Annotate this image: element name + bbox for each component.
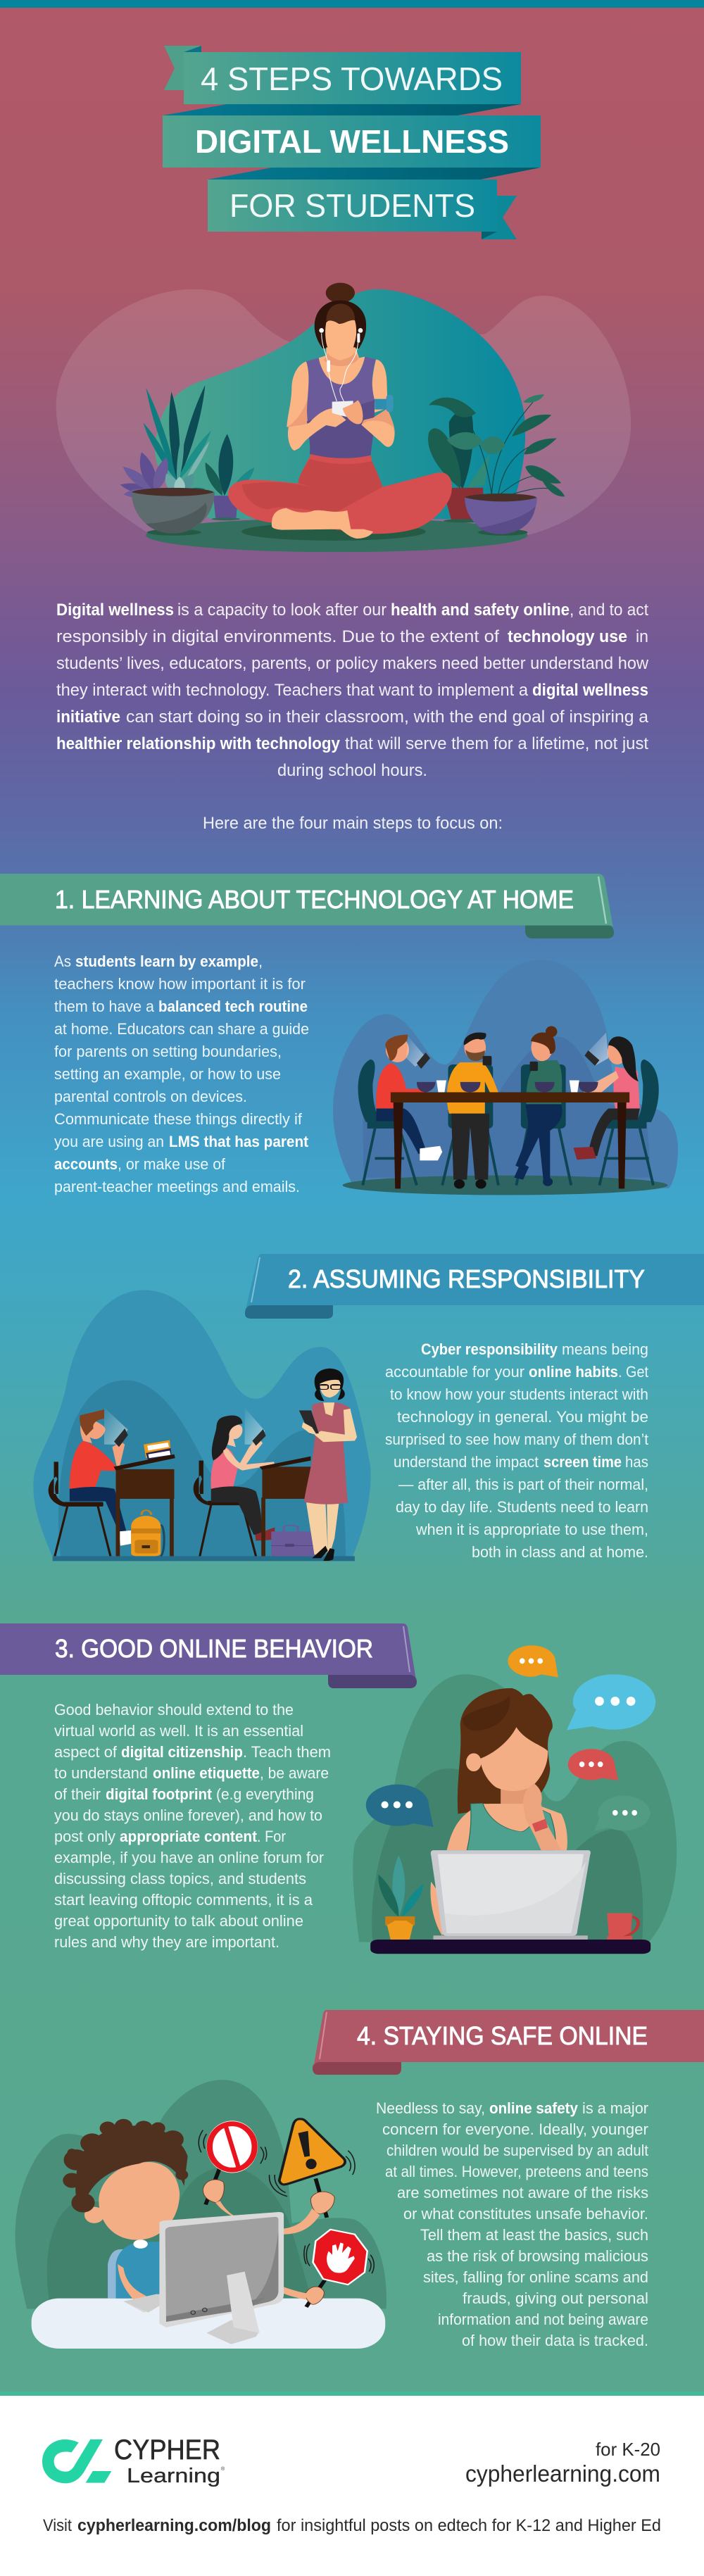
step 3 body text: online etiquette [153,1764,260,1782]
intro paragraph: Digital wellness [56,601,174,620]
backpack [131,1510,164,1556]
step 3 body text: virtual world as well. It is an essential [54,1722,303,1740]
step 3 body text: , be aware [260,1764,329,1782]
footer call to action [43,2516,661,2535]
step 3 body text: start leaving offtopic comments, it is a [54,1891,313,1909]
step 2 body text: screen time [543,1453,622,1471]
step 3 body text: aspect of [54,1743,118,1761]
girl student [194,1408,275,1556]
logo: CYPHER Learning: Learning [127,2465,220,2487]
right plants [428,394,565,534]
step 3 heading banner: 3. GOOD ONLINE BEHAVIOR [55,1634,373,1663]
step 1 body text: Communicate these things directly if [54,1110,303,1128]
step 4 body text: information and not being aware [438,2311,648,2328]
step 2 body text [385,1340,648,1561]
person 1 [376,1035,442,1160]
intro paragraph: students’ lives, educators, parents, or policy makers need better understand how [56,654,649,673]
step 4 body text: as the risk of browsing malicious [427,2247,648,2265]
warning triangle sign [279,2119,345,2235]
step 1 body text: them to have a [54,998,155,1015]
step 4 body text: Needless to say, [376,2099,485,2117]
step 3 body text: digital footprint [106,1785,213,1803]
logo: CYPHER Learning: ® [221,2466,225,2472]
boy student [49,1407,131,1556]
step 1 body text [54,953,309,1195]
step 3 body text: discussing class topics, and students [54,1870,306,1887]
step 2 body text: understand the impact [394,1453,539,1471]
red mug [607,1913,639,1940]
step 4 body text: children would be supervised by an adult [386,2142,648,2159]
keyboard [123,2294,161,2313]
intro paragraph [56,601,649,780]
intro paragraph: initiative [56,708,120,727]
books [144,1440,172,1461]
no-entry sign [203,2121,258,2218]
intro paragraph: technology use [508,627,627,646]
step 3 body text: . Teach them [243,1743,331,1761]
step 3 body text: digital citizenship [121,1743,243,1761]
intro paragraph: during school hours. [277,761,427,780]
intro paragraph: that will serve them for a lifetime, not just [345,734,648,753]
step 3 body text: appropriate content [120,1828,258,1845]
shake marks [199,2130,374,2273]
step 1 body text: students learn by example [75,953,258,970]
step 2 body text: when it is appropriate to use them, [415,1521,648,1538]
step 2 body text: online habits [529,1363,618,1381]
logo: CYPHER Learning: CYPHER [114,2434,220,2465]
step 1 body text: , [258,953,263,970]
hero illustration: woman meditating with phone among plants [56,283,631,552]
step 4 body text [376,2099,648,2349]
step 2 body text: day to day life. Students need to learn [396,1498,648,1516]
title ribbon [163,46,541,239]
computer monitor [159,2212,284,2344]
step 1 body text: parent-teacher meetings and emails. [54,1178,300,1195]
step 3 illustration: woman thinking at laptop with speech bubbles [353,1645,677,1954]
step 3 body text: of their [54,1785,101,1803]
step 2 illustration: students at desks with teacher [33,1290,371,1561]
step 2 body text: technology in general. You might be [397,1408,648,1426]
footer k-20 label and URL [465,2439,660,2487]
footer call to action: Visit [43,2516,72,2535]
top bar [0,0,704,8]
step 2 body text: accountable for your [385,1363,524,1381]
intro paragraph: healthier relationship with technology [56,734,341,753]
intro paragraph: in [636,627,648,646]
step 4 body text: sites, falling for online scams and [423,2268,648,2286]
table [391,1080,629,1188]
footer call to action: for insightful posts on edtech for K-12 and Higher Ed [277,2516,661,2535]
step 1 heading banner: 1. LEARNING ABOUT TECHNOLOGY AT HOME [55,885,574,914]
dark blue speech bubble [366,1785,433,1827]
green speech bubble [594,1796,650,1831]
step 1 heading banner [0,874,614,938]
step 1 body text: you are using an [54,1133,164,1150]
step 3 body text: you do stays online forever), and how to [54,1807,322,1824]
laptop [430,1850,591,1940]
boy [63,2119,188,2313]
desk [32,2299,385,2349]
step 4 body text: of how their data is tracked. [462,2332,648,2349]
step 1 body text: balanced tech routine [158,998,308,1015]
person 2 [447,1032,498,1188]
intro paragraph: responsibly in digital environments. Due to the extent of [56,627,499,646]
title ribbon: DIGITAL WELLNESS [195,123,509,160]
step 4 body text: Tell them at least the basics, such [420,2226,648,2244]
woman [228,283,452,539]
footer call to action: cypherlearning.com/blog [77,2516,271,2535]
intro paragraph: , and to act [570,601,648,620]
step 4 body text: or what constitutes unsafe behavior. [403,2205,648,2223]
intro paragraph: is a capacity to look after our [177,601,386,620]
footer k-20 label and URL: for K-20 [596,2439,660,2460]
step 2 body text: means being [562,1340,648,1358]
step 2 heading banner: 2. ASSUMING RESPONSIBILITY [288,1264,645,1293]
title ribbon: FOR STUDENTS [230,187,475,224]
step 3 body text: . For [257,1828,286,1845]
footer teal strip [0,2392,704,2396]
title ribbon: 4 STEPS TOWARDS [201,61,503,97]
step 3 body text: to understand [54,1764,148,1782]
intro paragraph: health and safety online [391,601,570,620]
red speech bubble [568,1749,618,1780]
orange speech bubble [508,1645,558,1677]
step 1 body text: parental controls on devices. [54,1088,247,1105]
step 3 body text: (e.g everything [216,1785,314,1803]
step 3 body text: example, if you have an online forum for [54,1849,324,1866]
step 1 body text: LMS that has parent [169,1133,309,1150]
lead-in sentence: Here are the four main steps to focus on: [203,814,503,833]
step 3 heading banner [0,1623,417,1688]
step 2 heading banner [245,1254,704,1319]
step 3 body text: rules and why they are important. [54,1933,279,1951]
step 3 body text [54,1701,331,1951]
step 2 body text: — after all, this is part of their normal, [398,1476,648,1493]
step 4 body text: at all times. However, preteens and teens [385,2163,648,2180]
intro paragraph: they interact with technology. Teachers that want to implement a [56,681,529,700]
stop sign with hand [276,2230,367,2307]
step 4 body text: is a major [582,2099,648,2117]
step 1 body text: , or make use of [118,1155,226,1173]
teacher [299,1369,357,1561]
purple bag [271,1526,314,1556]
step 1 body text: accounts [54,1155,118,1173]
step 1 body text: at home. Educators can share a guide [54,1020,309,1038]
desk 2 [260,1457,312,1556]
step 4 illustration: boy at computer with warning signs [15,2080,386,2349]
intro paragraph: digital wellness [532,681,648,700]
step 2 body text: surprised to see how many of them don’t [385,1431,648,1448]
footer k-20 label and URL: cypherlearning.com [465,2461,660,2487]
desk [370,1940,650,1954]
step 1 illustration: family at table using phones [333,960,678,1195]
person 3 [514,1026,562,1186]
step 1 body text: setting an example, or how to use [54,1065,281,1083]
footer panel [0,2396,704,2576]
step 2 body text: both in class and at home. [472,1543,648,1561]
step 1 body text: for parents on setting boundaries, [54,1043,282,1060]
step 2 body text: to know how your students interact with [390,1386,648,1403]
intro paragraph: can start doing so in their classroom, with the end goal of inspiring a [126,708,649,727]
step 3 body text: post only [54,1828,115,1845]
step 2 body text: Cyber responsibility [421,1340,558,1358]
blue speech bubble [567,1674,655,1730]
desk 1 [113,1455,175,1556]
step 1 body text: teachers know how important it is for [54,975,306,993]
step 1 body text: As [54,953,71,970]
step 4 body text: are sometimes not aware of the risks [397,2184,648,2201]
chairs [358,1060,659,1186]
step 4 heading banner [313,2010,704,2075]
step 4 body text: frauds, giving out personal [463,2289,648,2307]
step 4 body text: concern for everyone. Ideally, younger [382,2121,648,2138]
woman [447,1688,567,1850]
step 2 body text: has [625,1453,648,1471]
step 4 body text: online safety [489,2099,579,2117]
step 4 heading banner: 4. STAYING SAFE ONLINE [357,2021,648,2050]
step 3 body text: Good behavior should extend to the [54,1701,294,1719]
step 3 body text: great opportunity to talk about online [54,1912,303,1930]
logo: CYPHER Learning [42,2434,225,2487]
step 2 body text: . Get [618,1363,648,1381]
plant and pot [373,1855,427,1940]
left plants [119,384,258,534]
person 4 [573,1033,640,1160]
